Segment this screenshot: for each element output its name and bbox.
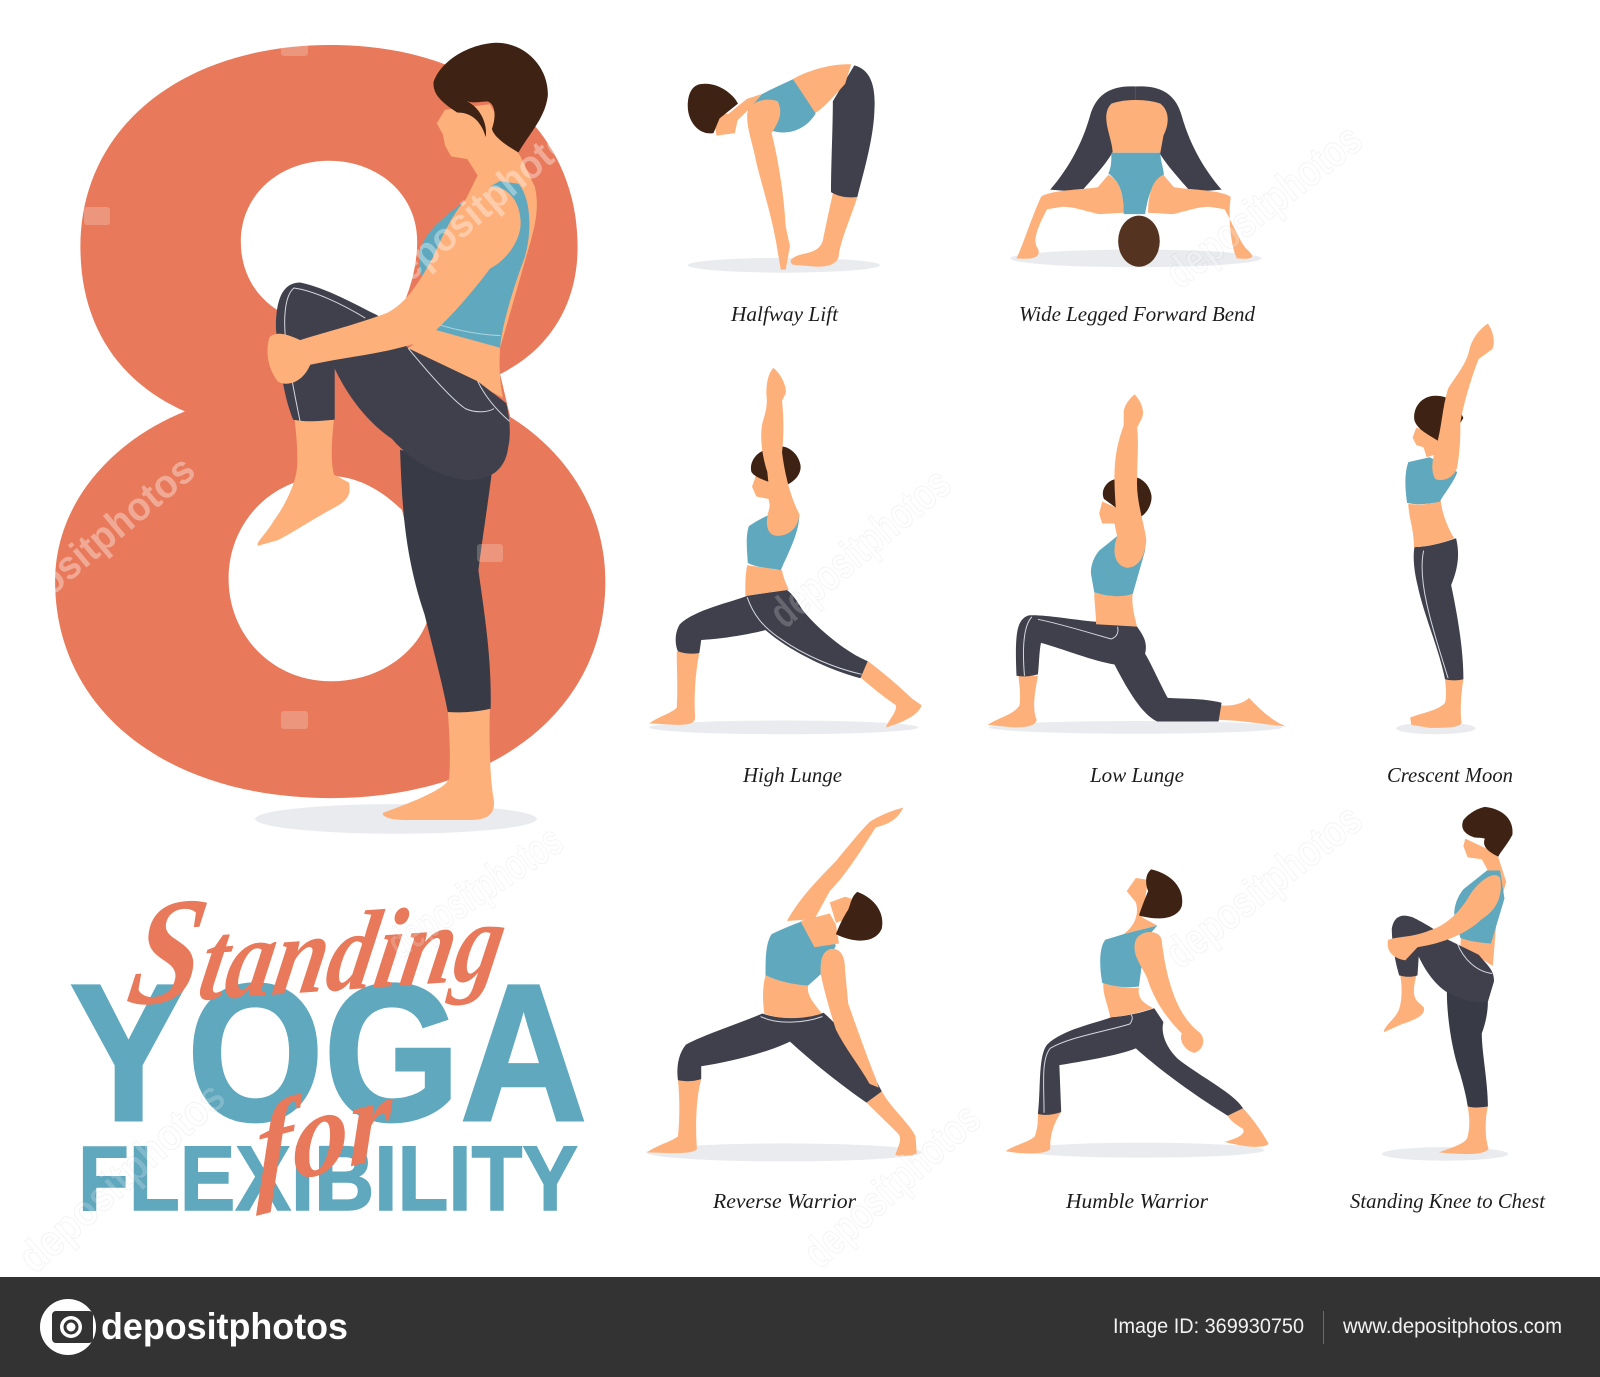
caption: crescent moon: Crescent Moon (1387, 763, 1513, 787)
caption: standing knee to chest: Standing Knee to Chest (1350, 1189, 1546, 1213)
pose: standing knee to chest (1382, 807, 1513, 1161)
teal top (419, 181, 529, 348)
camera watermark icons (84, 39, 503, 729)
watermarks (0, 105, 1371, 1282)
pose: high lunge (649, 368, 922, 734)
caption: low lunge: Low Lunge (1089, 763, 1184, 787)
caption: humble warrior: Humble Warrior (1065, 1189, 1209, 1213)
big number 8 (55, 45, 605, 798)
watermarks: depositphotos (9, 1072, 235, 1282)
arm and hand (267, 187, 521, 384)
footer bar (0, 1277, 1600, 1377)
watermarks: depositphotos (370, 105, 595, 305)
footer image id: Image ID: 369930750 (1113, 1315, 1304, 1338)
footer logo text: depositphotos (101, 1306, 348, 1347)
footer website: www.depositphotos.com (1342, 1315, 1562, 1338)
caption: reverse warrior: Reverse Warrior (712, 1189, 857, 1213)
standing lower leg and foot (383, 708, 494, 820)
standing leg leggings (400, 450, 492, 712)
watermarks: depositphotos (794, 1094, 990, 1277)
title: FLEXIBILITY: FLEXIBILITY (78, 1128, 578, 1230)
watermarks: depositphotos (378, 816, 571, 968)
watermarks: depositphotos (760, 459, 960, 638)
neck, back and midriff skin (408, 104, 537, 398)
watermarks: depositphotos (1156, 115, 1371, 298)
raised thigh leggings (276, 282, 510, 480)
pose: crescent moon (1396, 324, 1494, 734)
title script: for: for (256, 1047, 393, 1216)
watermarks: depositphotos (1156, 795, 1371, 978)
raised foreleg and foot (257, 420, 350, 546)
pose: humble warrior (1005, 869, 1269, 1158)
caption: wide legged forward bend: Wide Legged Forward Bend (1019, 302, 1255, 326)
footer logo: camera badge (40, 1299, 96, 1355)
title script: Standing: Standing (118, 843, 522, 1038)
main figure: standing knee to chest (255, 43, 548, 834)
caption: halfway lift: Halfway Lift (730, 302, 839, 326)
caption: high lunge: High Lunge (742, 763, 842, 787)
pose: halfway lift (688, 64, 880, 273)
pose: wide legged forward bend (1010, 86, 1261, 267)
ground shadow (255, 804, 537, 834)
title: YOGA: YOGA (70, 944, 587, 1162)
hair (433, 43, 548, 152)
pose: low lunge (988, 394, 1286, 734)
pose: reverse warrior (646, 808, 922, 1161)
